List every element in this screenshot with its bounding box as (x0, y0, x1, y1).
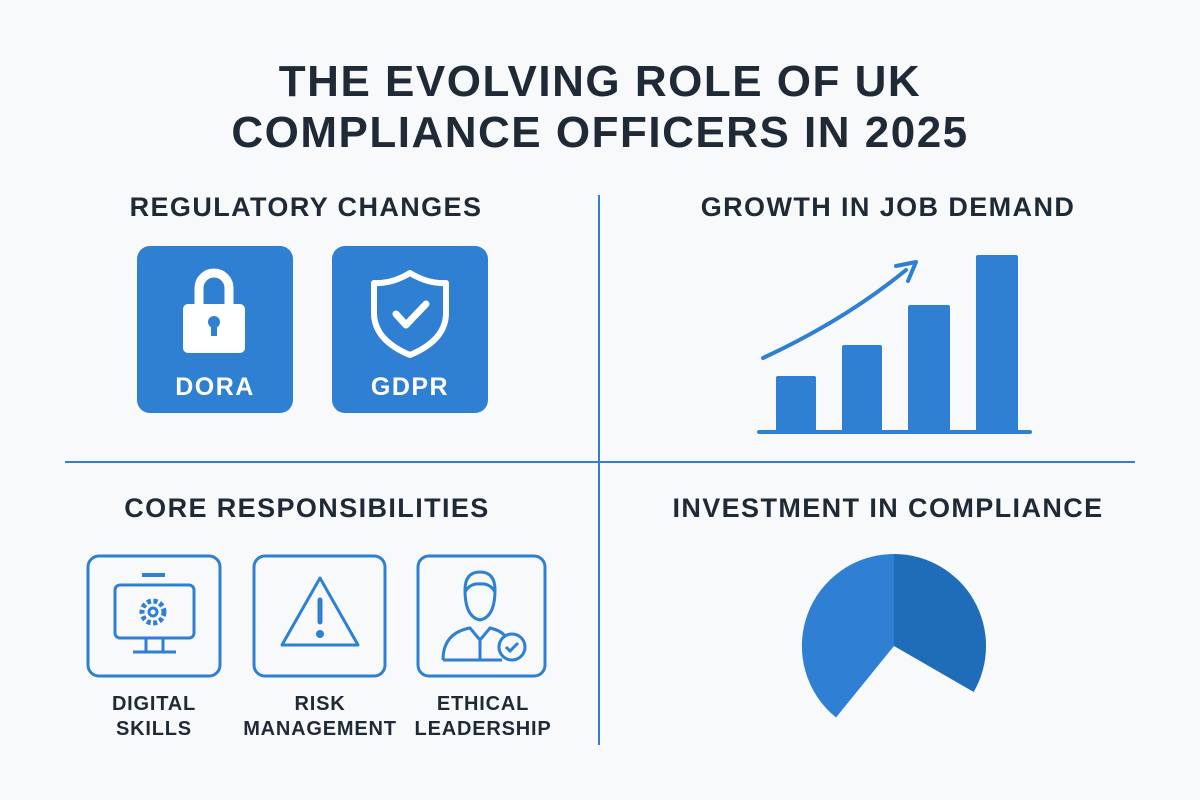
panel: investment in compliance (672, 493, 1104, 718)
title (231, 57, 969, 157)
labels: responsibilities: MANAGEMENT (243, 718, 397, 740)
labels: responsibilities: RISK (295, 693, 345, 715)
labels: responsibilities: SKILLS (116, 718, 192, 740)
labels: responsibilities: DIGITAL (112, 693, 196, 715)
panel: growth in job demand (701, 192, 1075, 434)
title: THE EVOLVING ROLE OF UK (279, 57, 921, 106)
icon: DORA lock card: DORA (175, 373, 255, 401)
pie chart (802, 554, 986, 718)
arrow: growth trend (763, 262, 916, 358)
icon: digital skills monitor (88, 556, 220, 676)
icon: ethical leadership person (418, 556, 545, 676)
panel: regulatory changes (130, 192, 488, 413)
heading: core responsibilities: CORE RESPONSIBILITIES (124, 493, 490, 523)
icon: risk warning triangle (254, 556, 385, 676)
labels: responsibilities: LEADERSHIP (415, 718, 551, 740)
panel: core responsibilities (88, 493, 551, 740)
icon: GDPR shield card (332, 246, 488, 413)
labels: responsibilities: ETHICAL (437, 693, 529, 715)
icon: DORA lock card (137, 246, 293, 413)
bar chart (757, 255, 1032, 434)
heading: regulatory changes: REGULATORY CHANGES (130, 192, 482, 222)
labels: responsibilities (112, 693, 551, 740)
title: COMPLIANCE OFFICERS IN 2025 (231, 108, 969, 157)
heading: growth in job demand: GROWTH IN JOB DEMAND (701, 192, 1075, 222)
heading: investment in compliance: INVESTMENT IN COMPLIANCE (672, 493, 1104, 523)
icon: GDPR shield card: GDPR (371, 373, 449, 401)
